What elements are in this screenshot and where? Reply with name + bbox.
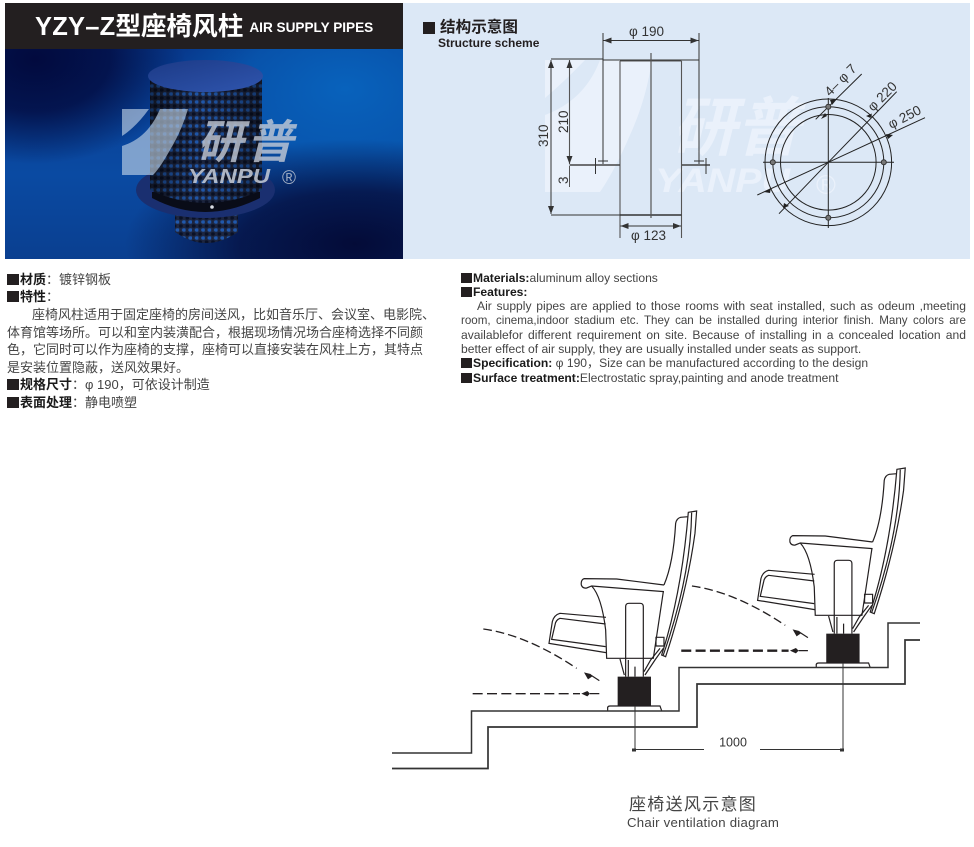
English description: room, cinema,indoor stadium etc. They can be installed during interior finish. Many colors are: [461, 314, 966, 327]
seat with air pipe, front row: [473, 511, 697, 711]
cap: [148, 60, 263, 92]
dimension labels: 3: [556, 176, 571, 184]
watermark logo: 研普: [672, 92, 806, 164]
dimension labels: [536, 24, 666, 243]
side elevation drawing: [536, 24, 710, 243]
Chinese description: 表面处理：静电喷塑: [20, 395, 137, 410]
Chinese description: 座椅风柱适用于固定座椅的房间送风，比如音乐厅、会议室、电影院、: [32, 307, 435, 322]
Chinese description: 色，它同时可以作为座椅的支撑，座椅可以直接安装在风柱上方，其特点: [7, 342, 423, 357]
body: [150, 78, 262, 203]
dimension labels: 310: [536, 124, 551, 147]
English description: Specification: φ 190，Size can be manufactured according to the design: [473, 356, 868, 370]
watermark logo: ®: [816, 170, 836, 200]
Chinese description: 体育馆等场所。可以和室内装潢配合，根据现场情况场合座椅选择不同颜: [7, 325, 423, 340]
stepped floor: [392, 623, 920, 768]
flange plan drawing: [757, 61, 925, 228]
Chinese description: 材质：镀锌钢板: [20, 272, 111, 287]
English description: Features:: [473, 285, 527, 299]
English description: Surface treatment:Electrostatic spray,painting and anode treatment: [473, 371, 838, 385]
plan dimension labels: φ 250: [886, 102, 924, 132]
logo latin: YANPU: [188, 166, 271, 188]
rivet: [210, 205, 214, 209]
panel: structure scheme background: [403, 3, 970, 259]
dimension 1000: 1000: [719, 736, 747, 750]
diagram caption: [627, 795, 779, 830]
English description: [461, 271, 966, 385]
Chinese description: 特性：: [20, 289, 59, 304]
seat with air pipe, rear row: [681, 468, 905, 668]
English description: availablefor different requirement on site. Because of installing in a concealed location and: [461, 328, 966, 342]
logo registered mark: ®: [282, 168, 296, 189]
structure scheme heading: [423, 18, 539, 50]
collar: [152, 192, 260, 212]
plan dimension labels: [822, 61, 924, 132]
flange: [136, 162, 275, 218]
title: YZY–Z型座椅风柱 AIR SUPPLY PIPES: [35, 13, 373, 41]
plan dimension labels: φ 220: [865, 79, 900, 114]
dimension labels: φ 123: [631, 228, 666, 243]
watermark logo: [545, 60, 836, 200]
English description: better effect of air supply, they are usually installed under seats as support.: [461, 342, 861, 356]
diagram caption: Chair ventilation diagram: [627, 815, 779, 830]
dimension labels: φ 190: [629, 24, 664, 39]
English description: Air supply pipes are applied to those rooms with seat installed, such as odeum ,meeting: [477, 299, 966, 313]
plan dimension labels: 4– φ 7: [822, 61, 860, 99]
panel: product photo: [5, 49, 403, 259]
header bar: [5, 3, 403, 49]
logo swoosh: [122, 109, 188, 175]
Chinese description: 规格尺寸：φ 190，可依设计制造: [20, 377, 210, 392]
lower pipe: [175, 210, 238, 243]
watermark logo: YANPU: [655, 162, 792, 200]
dimension labels: 210: [556, 110, 571, 133]
English description: Materials:aluminum alloy sections: [473, 271, 658, 285]
logo name: 研普: [197, 116, 298, 168]
structure scheme heading: Structure scheme: [438, 36, 539, 50]
structure scheme heading: 结构示意图: [440, 19, 518, 36]
diagram caption: 座椅送风示意图: [629, 795, 757, 814]
Chinese description: 是安装位置隐蔽，送风效果好。: [7, 360, 189, 375]
Chinese description: [7, 272, 435, 410]
